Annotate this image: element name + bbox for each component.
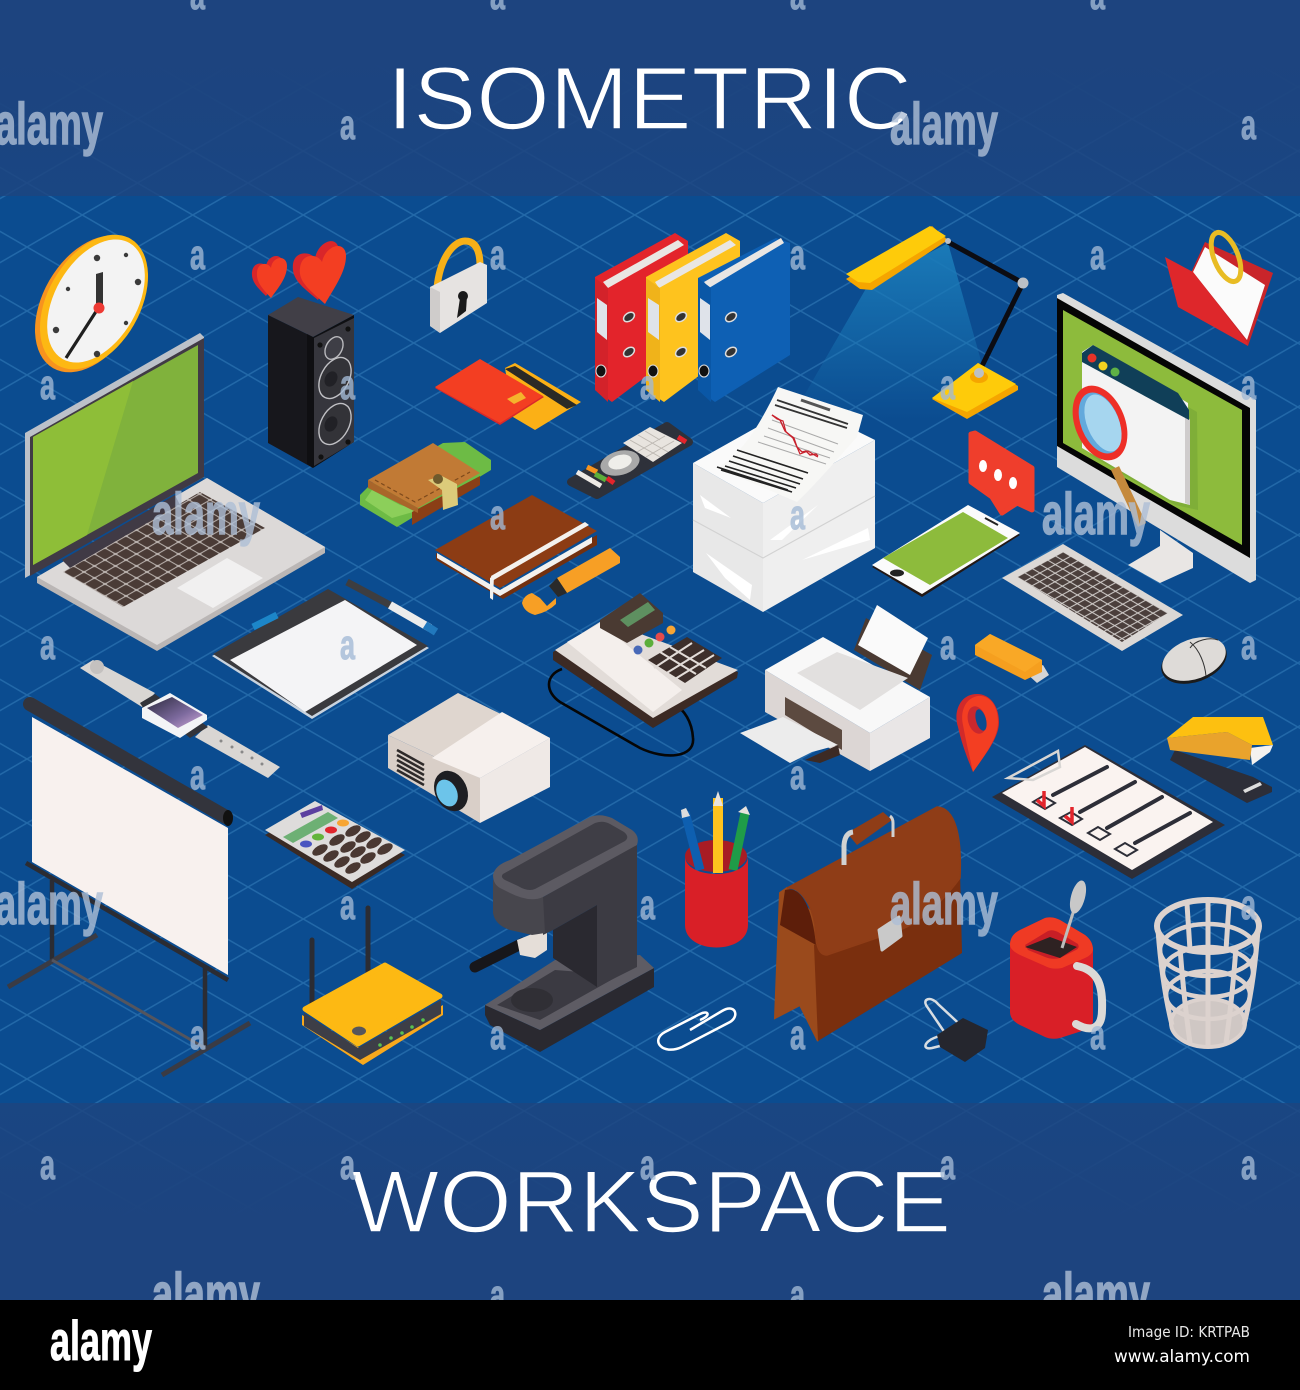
watermarks: a — [40, 361, 55, 408]
watermarks: a — [1241, 101, 1256, 148]
icon: binder clip — [925, 999, 988, 1062]
watermarks: a — [1241, 621, 1256, 668]
watermarks: a — [340, 1141, 355, 1188]
icon: wire waste basket — [1157, 900, 1259, 1048]
watermarks: a — [1241, 1141, 1256, 1188]
icon: usb drive — [975, 634, 1049, 683]
icon: remote control — [571, 426, 689, 495]
watermarks: a — [940, 361, 955, 408]
watermarks: a — [1241, 881, 1256, 928]
watermarks: a — [790, 1271, 805, 1318]
title: isometric: ISOMETRIC — [387, 48, 912, 148]
icon: stapler — [1167, 717, 1273, 803]
watermarks: a — [190, 1011, 205, 1058]
icon: calculator — [265, 801, 405, 889]
icon: speaker — [268, 297, 358, 468]
watermarks: a — [40, 621, 55, 668]
watermarks: a — [340, 361, 355, 408]
icon: paper clip — [658, 1008, 735, 1050]
icon: desk lamp — [790, 226, 1028, 420]
icon: pencil cup — [681, 791, 750, 948]
watermarks: a — [640, 881, 655, 928]
icon: desk phone — [549, 593, 738, 755]
watermarks: a — [1090, 231, 1105, 278]
icon: drawing tablet — [212, 582, 436, 719]
watermarks: alamy — [1042, 482, 1150, 547]
icon: paper stack — [693, 387, 875, 612]
icon: coffee machine — [475, 815, 654, 1052]
watermarks: a — [340, 621, 355, 668]
image id: Image ID: KRTPAB — [1128, 1323, 1250, 1341]
icon: folder — [1165, 228, 1273, 346]
icon: desktop monitor — [1057, 293, 1256, 583]
icon: chat bubble — [971, 433, 1032, 513]
watermarks: alamy — [152, 482, 260, 547]
watermarks: a — [190, 751, 205, 798]
icon: smartphone — [872, 505, 1020, 597]
watermarks: a — [190, 231, 205, 278]
watermarks: a — [790, 491, 805, 538]
icon: computer mouse — [1155, 629, 1233, 692]
icon: briefcase — [775, 807, 962, 1041]
icon: projector — [388, 693, 550, 823]
icon: laptop — [25, 333, 325, 651]
watermarks: a — [490, 1271, 505, 1318]
binder: yellow — [646, 233, 740, 402]
icon: notebook — [435, 495, 597, 600]
icon: smartwatch — [80, 660, 280, 778]
watermarks: alamy — [1042, 1262, 1150, 1327]
icon: location pin — [956, 694, 999, 772]
icon: credit cards — [435, 359, 581, 430]
watermarks: a — [490, 231, 505, 278]
watermarks: alamy — [152, 1262, 260, 1327]
icon: projection screen — [8, 704, 250, 1075]
watermarks: a — [490, 1011, 505, 1058]
watermarks: a — [1241, 361, 1256, 408]
watermarks: a — [1090, 1011, 1105, 1058]
watermarks: a — [940, 621, 955, 668]
watermarks: a — [40, 1141, 55, 1188]
watermarks: alamy — [890, 872, 998, 937]
watermarks: a — [940, 1141, 955, 1188]
footer logo: alamy — [50, 1309, 152, 1372]
watermarks: a — [790, 231, 805, 278]
watermarks: a — [340, 101, 355, 148]
icon: printer — [740, 605, 932, 771]
watermarks: a — [790, 751, 805, 798]
icon: wifi router — [302, 908, 443, 1065]
watermarks: a — [490, 491, 505, 538]
icon: wall clock — [12, 216, 170, 392]
watermarks: alamy — [890, 92, 998, 157]
footer bar — [0, 1300, 1300, 1390]
icon: hearts — [252, 241, 346, 304]
title: workspace: WORKSPACE — [351, 1152, 951, 1251]
icon: binders — [595, 233, 790, 402]
icon: clipboard checklist — [992, 745, 1225, 879]
binder: blue — [698, 238, 790, 402]
document on top — [717, 387, 863, 502]
watermarks: a — [640, 361, 655, 408]
watermarks: a — [640, 1141, 655, 1188]
website: www.alamy.com — [1114, 1347, 1250, 1367]
icon: padlock — [430, 241, 487, 333]
icon: wallet with money — [360, 442, 491, 527]
binder: red — [595, 233, 688, 402]
icon: coffee mug — [1010, 879, 1102, 1039]
watermarks: a — [790, 1011, 805, 1058]
icon: keyboard — [1002, 544, 1183, 651]
icon: highlighter — [522, 548, 620, 615]
watermarks: a — [340, 881, 355, 928]
